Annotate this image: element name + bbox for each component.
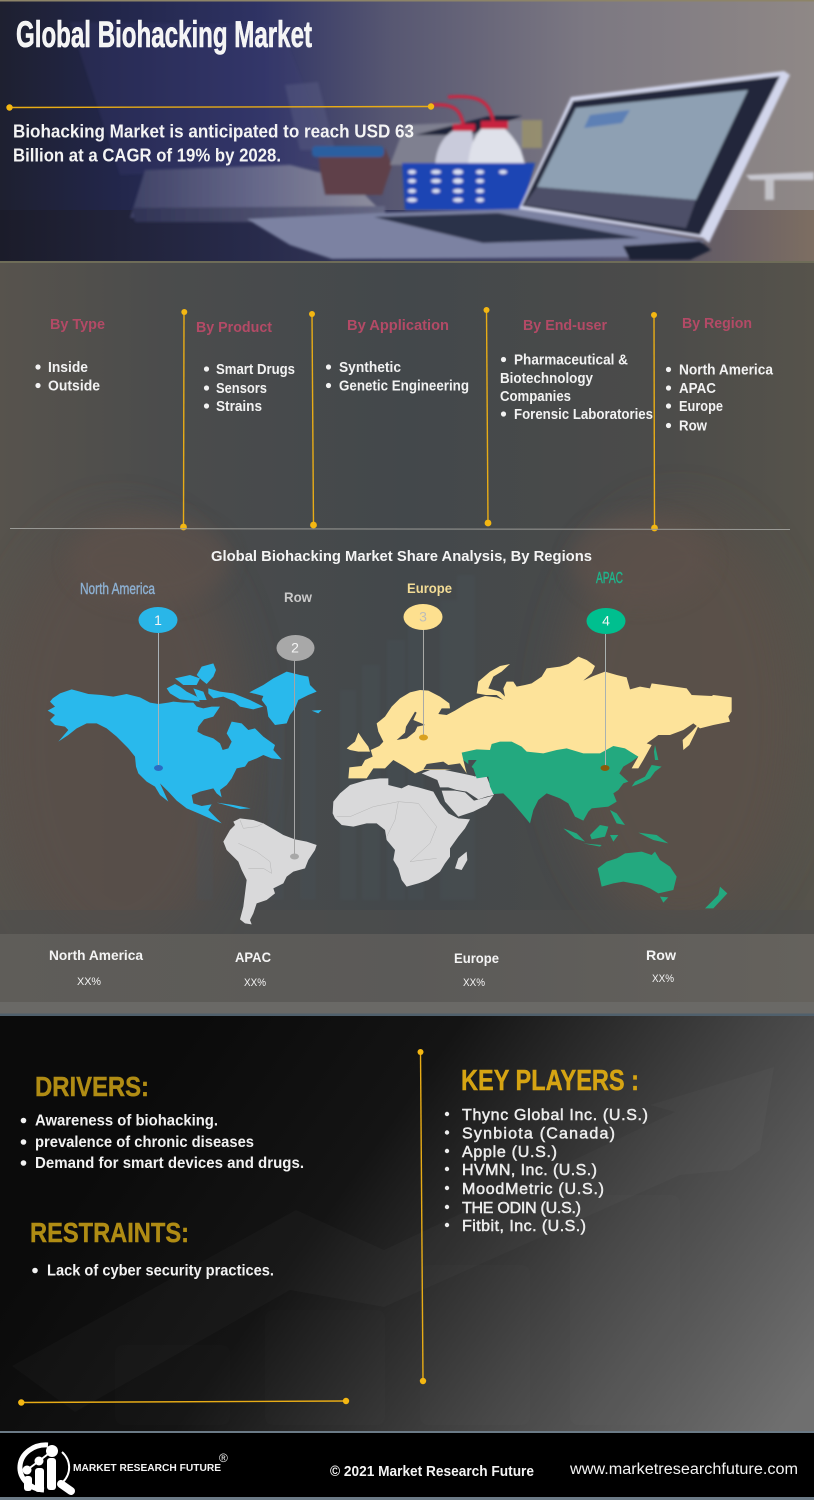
- hero photo: laptop base: [247, 209, 706, 259]
- hero subtitle: [13, 122, 414, 166]
- column: by product: Sensors: [216, 381, 267, 397]
- hero photo: blue basket: [402, 163, 535, 210]
- column: by end-user: By End-user: [523, 317, 607, 334]
- vertical divider: [418, 1049, 426, 1384]
- column: by region: By Region: [682, 315, 752, 332]
- drivers: prevalence of chronic diseases: [35, 1134, 254, 1151]
- region pin: apac: [586, 570, 626, 771]
- hero photo: bottles: [435, 130, 475, 165]
- drivers: Awareness of biohacking.: [35, 1112, 218, 1130]
- column dividers: [10, 307, 790, 531]
- drivers: DRIVERS:: [35, 1071, 149, 1102]
- column: by region: Row: [679, 418, 708, 434]
- panel: drivers restraints key players: [0, 1016, 814, 1431]
- key players: Synbiota (Canada): [462, 1126, 615, 1142]
- share: europe: XX%: [463, 977, 485, 989]
- map: south america: [223, 818, 317, 924]
- column: by product: [196, 319, 295, 415]
- region pin: row: Row: [284, 589, 312, 605]
- column: by product: Strains: [216, 399, 262, 415]
- column: by end-user: Forensic Laboratories: [514, 407, 653, 423]
- region pin: north america: [80, 581, 178, 771]
- title: Global Biohacking Market: [16, 14, 312, 55]
- logo wordmark: MARKET RESEARCH FUTURE: [73, 1462, 221, 1474]
- share: north america: North America: [49, 947, 143, 963]
- map: asia pacific: [462, 742, 727, 908]
- column: by region: APAC: [679, 381, 716, 397]
- hero subtitle: Biohacking Market is anticipated to reach USD 63: [13, 122, 414, 142]
- share: row: Row: [646, 947, 676, 963]
- share: row: [646, 947, 676, 985]
- region pin: europe: 3: [419, 608, 427, 624]
- column: by application: [326, 317, 469, 394]
- column: by region: Europe: [679, 399, 723, 415]
- region pin: europe: [404, 580, 452, 740]
- column: by end-user: Companies: [500, 389, 571, 405]
- background rising arrow: [12, 1067, 774, 1425]
- panel: segmentation columns: [10, 307, 790, 531]
- background bars behind map: [197, 575, 475, 900]
- key players: Apple (U.S.): [462, 1144, 557, 1161]
- column: by product: By Product: [196, 319, 272, 336]
- share: north america: XX%: [77, 976, 101, 988]
- region pin: north america: 1: [154, 612, 162, 628]
- key players: MoodMetric (U.S.): [462, 1181, 604, 1198]
- restraints: RESTRAINTS:: [30, 1217, 189, 1248]
- key players: THE ODIN (U.S.): [462, 1200, 581, 1217]
- share: apac: APAC: [235, 949, 271, 965]
- key players: Thync Global Inc. (U.S.): [462, 1107, 648, 1124]
- hero photo: book stack: [130, 165, 385, 218]
- region pin: apac: 4: [602, 612, 610, 628]
- column: by end-user: [500, 317, 653, 423]
- restraints: Lack of cyber security practices.: [47, 1262, 274, 1280]
- world map: [48, 657, 732, 924]
- website: www.marketresearchfuture.com: [569, 1461, 798, 1478]
- column: by type: [35, 316, 105, 394]
- hero photo: printer box: [390, 120, 522, 165]
- map heading: Global Biohacking Market Share Analysis, By Regions: [211, 548, 592, 565]
- region pin: europe: Europe: [407, 580, 452, 596]
- hero subtitle: Billion at a CAGR of 19% by 2028.: [13, 146, 281, 166]
- column: by type: Outside: [48, 378, 100, 394]
- region pin: row: 2: [291, 640, 299, 656]
- region pin: apac: APAC: [596, 570, 623, 587]
- hero photo: side table: [746, 172, 814, 180]
- restraints: [30, 1217, 274, 1280]
- map: africa and middle east: [333, 770, 494, 887]
- panel: share band: [0, 934, 814, 1016]
- panel: hero banner: [0, 0, 814, 261]
- column: by application: By Application: [347, 317, 449, 334]
- hero photo: jar: [318, 148, 392, 195]
- hero divider line: [6, 103, 434, 111]
- icon: logo magnifier: [20, 1445, 71, 1492]
- map: europe and russia: [347, 657, 732, 778]
- panel: footer: [0, 1431, 814, 1500]
- share: apac: [235, 949, 271, 989]
- share: europe: Europe: [454, 950, 499, 966]
- share: apac: XX%: [244, 977, 266, 989]
- column: by type: By Type: [50, 316, 105, 333]
- column: by region: North America: [679, 362, 774, 378]
- drivers: [21, 1071, 304, 1172]
- drivers: Demand for smart devices and drugs.: [35, 1155, 304, 1172]
- copyright: © 2021 Market Research Future: [330, 1464, 534, 1480]
- key players: HVMN, Inc. (U.S.): [462, 1162, 597, 1179]
- key players: KEY PLAYERS :: [461, 1065, 639, 1097]
- column: by application: Genetic Engineering: [339, 378, 469, 394]
- hero photo: tubes: [431, 97, 494, 130]
- column: by type: Inside: [48, 360, 88, 376]
- map: north america: [48, 663, 322, 823]
- logo wordmark: [73, 1451, 228, 1474]
- column: by end-user: Pharmaceutical &: [514, 352, 628, 368]
- horizontal divider: [18, 1398, 349, 1406]
- share: europe: [454, 950, 499, 989]
- share: north america: [49, 947, 143, 988]
- hero photo: paper sheet: [70, 22, 814, 260]
- share: row: XX%: [652, 973, 674, 985]
- panel: market background: [0, 261, 814, 1016]
- key players: Fitbit, Inc. (U.S.): [462, 1218, 586, 1235]
- hero photo: laptop screen: [519, 71, 790, 243]
- region pin: row: [276, 589, 314, 860]
- column: by application: Synthetic: [339, 360, 401, 376]
- column: by product: Smart Drugs: [216, 362, 295, 378]
- key players: [445, 1065, 648, 1235]
- column: by region: [666, 315, 774, 434]
- region pin: north america: North America: [80, 581, 155, 598]
- logo wordmark: ®: [219, 1451, 228, 1465]
- column: by end-user: Biotechnology: [500, 371, 593, 387]
